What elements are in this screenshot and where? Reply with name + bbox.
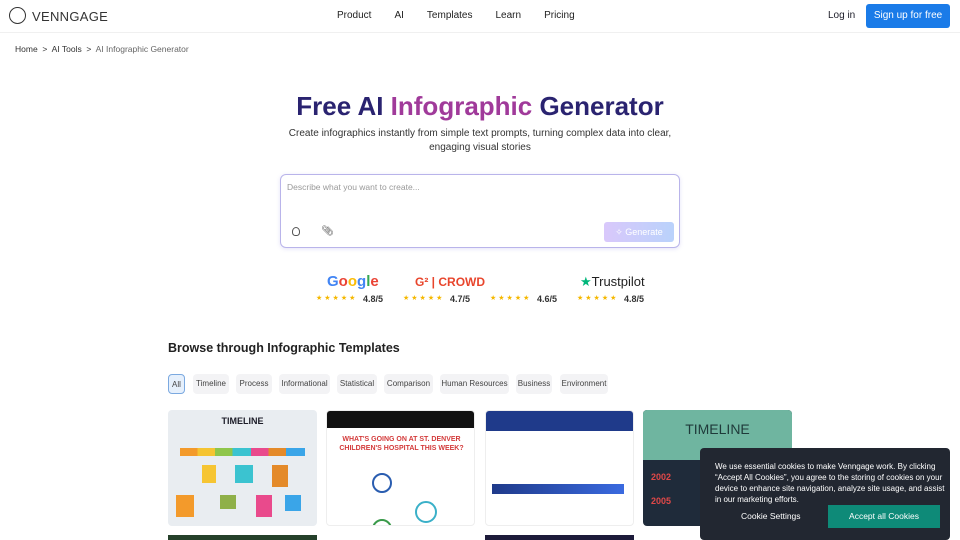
- generate button: ✧ Generate: [615, 227, 663, 237]
- ratings: 4.7/5: [450, 294, 470, 304]
- trustpilot: ★Trustpilot: [580, 274, 645, 289]
- google: Google: [327, 273, 379, 290]
- card: timeline dark: 2002: [651, 472, 671, 482]
- accept button: Accept all Cookies: [849, 511, 919, 521]
- filter chips: Informational: [281, 379, 328, 388]
- title: Free AI Infographic Generator: [296, 91, 664, 121]
- filter chips: Process: [240, 379, 268, 388]
- header: [0, 0, 960, 33]
- ratings: ★★★★★: [316, 295, 357, 302]
- nav: Product AI Templates Learn Pricing: [337, 10, 575, 21]
- signup button: Sign up for free: [874, 10, 942, 21]
- filter chips: Environment: [562, 379, 606, 388]
- card: timeline dark: 2005: [651, 496, 671, 506]
- card: timeline: [168, 410, 317, 526]
- filter chips: Statistical: [340, 379, 374, 388]
- signup button: [866, 4, 950, 28]
- card: timeline dark: [643, 410, 792, 526]
- generate button: [604, 222, 674, 242]
- ratings: ★★★★★: [490, 295, 531, 302]
- subtitle: Create infographics instantly from simple text prompts, turning complex data into clear, engaging visual stories: [289, 128, 671, 153]
- breadcrumb: Home > AI Tools > AI Infographic Generator: [15, 44, 189, 54]
- filter chips: Business: [518, 379, 550, 388]
- card: hospital: WHAT'S GOING ON AT ST. DENVER CHILDREN'S HOSPITAL THIS WEEK?: [339, 436, 464, 452]
- icon: clip: 📎︎: [321, 226, 334, 237]
- card: timeline dark: TIMELINE: [685, 421, 750, 437]
- cookie banner: [700, 448, 950, 540]
- ratings: 4.8/5: [363, 294, 383, 304]
- card: timeline: TIMELINE: [222, 416, 264, 426]
- icon: bulb: [292, 227, 300, 236]
- card: fundraising: [485, 410, 634, 526]
- ratings: [316, 273, 645, 304]
- row 2 partial: [168, 535, 317, 540]
- accept button: [828, 505, 940, 528]
- ratings: 4.8/5: [624, 294, 644, 304]
- ratings: 4.6/5: [537, 294, 557, 304]
- ratings: ★★★★★: [403, 295, 444, 302]
- prompt box: [280, 174, 680, 248]
- filter chips: All: [172, 380, 181, 389]
- filter chips: Human Resources: [441, 379, 508, 388]
- g2 crowd: G² | CROWD: [415, 275, 485, 289]
- section heading: Browse through Infographic Templates: [168, 341, 400, 355]
- filter chips: Comparison: [387, 379, 430, 388]
- cookie settings: Cookie Settings: [741, 511, 801, 521]
- filter chips: Timeline: [196, 379, 226, 388]
- logo: VENNGAGE: [32, 9, 108, 24]
- cookie banner: We use essential cookies to make Venngage work. By clicking “Accept All Cookies”, you agree to the storing of cookies on your device to enhance site navigation, analyze site usage, and assist in our marketing efforts.: [715, 462, 944, 504]
- logo: [9, 7, 108, 24]
- ratings: ★★★★★: [577, 295, 618, 302]
- card: hospital: [326, 410, 475, 526]
- login: Log in: [828, 10, 855, 21]
- filter chips: [168, 374, 608, 394]
- prompt box: Describe what you want to create...: [287, 182, 420, 192]
